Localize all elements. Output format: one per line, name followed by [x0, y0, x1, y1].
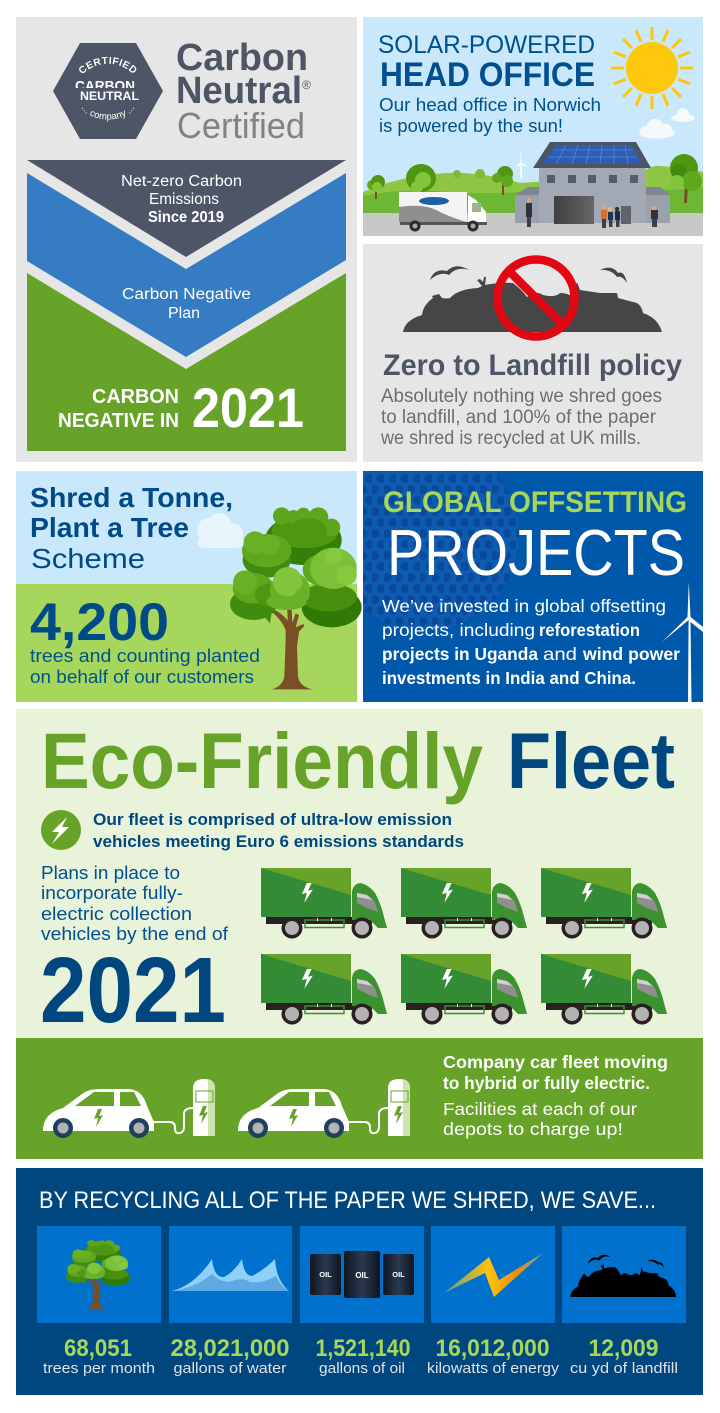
- icon: birds: [430, 266, 627, 283]
- icon: tree: [230, 507, 362, 689]
- chevron: carbon negative plan: Carbon Negative: [122, 286, 251, 303]
- heading: shred a tonne: Scheme: [31, 543, 145, 574]
- chevron: net-zero carbon emissions since 2019: [27, 160, 346, 257]
- text: landfill description: to landfill, and 100% of the paper: [381, 407, 657, 428]
- stat: gallons of water: [170, 1335, 290, 1377]
- stat: trees per month: [43, 1335, 155, 1377]
- icon: certified carbon neutral hexagon badge: company: [90, 110, 125, 122]
- stat: cu yd of landfill: cu yd of landfill: [570, 1360, 678, 1377]
- icon: landfill heap: [403, 277, 662, 332]
- text: landfill description: we shred is recycled at UK mills.: [380, 428, 641, 449]
- text: offsetting description: and: [543, 644, 577, 664]
- stat: gallons of water: gallons of water: [174, 1360, 287, 1377]
- heading: global offsetting projects: [383, 486, 687, 589]
- heading: eco-friendly fleet: Eco-Friendly: [41, 716, 483, 805]
- stat: trees per month: 68,051: [64, 1335, 132, 1362]
- stat: kilowatts of energy: kilowatts of energy: [427, 1360, 560, 1377]
- heading: solar-powered head office: [378, 31, 595, 94]
- chevron: carbon negative plan: [27, 173, 346, 357]
- chevron: carbon negative plan: Plan: [168, 305, 200, 322]
- text: head office description: is powered by the sun!: [379, 116, 563, 136]
- panel: eco-friendly fleet: [16, 709, 703, 1042]
- chevron: net-zero carbon emissions since 2019: Emissions: [149, 191, 219, 208]
- tile: oil: OIL: [355, 1271, 369, 1280]
- icon: lightning badge: [41, 810, 81, 850]
- illustration: shredding truck: [399, 192, 487, 232]
- panel: global offsetting projects: [363, 471, 703, 702]
- text: company car fleet: depots to charge up!: [443, 1119, 623, 1139]
- text: company car fleet: Company car fleet moving: [443, 1052, 668, 1072]
- icon: electric car and charger: [43, 1079, 215, 1138]
- stat: 4,200 trees: trees and counting planted: [30, 646, 260, 666]
- chevron: carbon negative in 2021: NEGATIVE IN: [58, 410, 179, 432]
- text: offsetting description: wind power: [582, 644, 680, 664]
- text: fleet emissions standard: [93, 810, 464, 851]
- tile: oil: [300, 1226, 424, 1323]
- tile: trees: [37, 1226, 161, 1323]
- icon: sun: [611, 27, 693, 109]
- text: electric vehicle plans: incorporate fully-: [41, 882, 183, 903]
- text: offsetting description: projects, including: [382, 620, 535, 640]
- icon: certified carbon neutral hexagon badge: CERTIFIED: [79, 56, 136, 73]
- heading: carbon neutral certified: ®: [302, 78, 311, 92]
- icon: certified carbon neutral hexagon badge: [53, 43, 163, 139]
- stat: kilowatts of energy: 16,012,000: [436, 1335, 550, 1362]
- heading: carbon neutral certified: Certified: [177, 105, 305, 146]
- icon: wind turbine: [516, 152, 527, 178]
- icon: certified carbon neutral hexagon badge: NEUTRAL: [80, 89, 139, 103]
- tile: oil: OIL: [392, 1270, 405, 1279]
- heading: shred a tonne: [30, 482, 233, 574]
- text: head office description: [379, 95, 601, 136]
- text: offsetting description: We’ve invested in global offsetting: [382, 596, 666, 616]
- heading: carbon neutral certified: [176, 37, 311, 146]
- panel: company car fleet: [16, 1038, 703, 1159]
- heading: carbon neutral certified: Carbon: [176, 37, 308, 79]
- icon: clouds: [639, 108, 695, 138]
- tile: energy: [431, 1226, 555, 1323]
- text: offsetting description: investments in India and China.: [382, 668, 636, 688]
- text: electric vehicle plans: electric collection: [41, 903, 192, 924]
- heading: shred a tonne: Plant a Tree: [30, 512, 189, 543]
- text: head office description: Our head office in Norwich: [379, 95, 601, 115]
- icon: dotted globe: [363, 471, 519, 631]
- panel: solar-powered head office: [363, 17, 703, 236]
- chevron: net-zero carbon emissions since 2019: Net-zero Carbon: [121, 173, 242, 190]
- text: offsetting description: reforestation: [539, 620, 640, 640]
- stat: gallons of oil: gallons of oil: [319, 1360, 405, 1377]
- chevron: carbon negative in 2021: [27, 273, 346, 451]
- text: electric vehicle plans: [41, 862, 229, 944]
- tile: oil: OIL: [319, 1270, 332, 1279]
- icon: cloud: [197, 513, 243, 548]
- icon: small trees: [367, 154, 702, 203]
- stat: gallons of water: 28,021,000: [170, 1335, 290, 1362]
- text: electric vehicle plans: Plans in place to: [41, 862, 180, 883]
- illustration: head office building: [515, 142, 670, 224]
- icons: six electric trucks: [261, 868, 667, 1024]
- chevron: carbon negative in 2021: CARBON: [92, 386, 179, 408]
- heading: shred a tonne: Shred a Tonne,: [30, 482, 233, 513]
- text: fleet emissions standard: Our fleet is comprised of ultra-low emission: [93, 810, 452, 829]
- heading: carbon neutral certified: Neutral: [176, 70, 302, 112]
- panel: recycling savings: [16, 1168, 703, 1395]
- text: offsetting description: [382, 596, 680, 688]
- stat: 2021: 2021: [40, 938, 226, 1042]
- illustration: staff figures: [526, 198, 658, 228]
- icon: prohibition sign: [498, 260, 574, 336]
- heading: eco-friendly fleet: Fleet: [507, 716, 675, 805]
- stat: gallons of oil: 1,521,140: [316, 1335, 410, 1362]
- icon: wind turbine: [662, 582, 703, 702]
- stat: cu yd of landfill: 12,009: [588, 1335, 658, 1362]
- heading: solar-powered head office: SOLAR-POWERED: [378, 31, 595, 59]
- heading: by recycling all of the paper: BY RECYCLING ALL OF THE PAPER WE SHRED, WE SAVE...: [39, 1187, 656, 1214]
- stat: 4,200 trees: 4,200: [30, 593, 169, 652]
- text: electric vehicle plans: vehicles by the end of: [41, 923, 229, 944]
- heading: solar-powered head office: HEAD OFFICE: [380, 56, 595, 94]
- panel: carbon neutral certified: [16, 17, 357, 462]
- text: landfill description: [380, 386, 662, 449]
- landscape: hills and road: [363, 166, 703, 236]
- stat: gallons of oil: [316, 1335, 410, 1377]
- panel: zero to landfill policy: [363, 244, 703, 462]
- stat: 4,200 trees: on behalf of our customers: [30, 667, 254, 687]
- stat: trees per month: trees per month: [43, 1360, 155, 1377]
- text: offsetting description: projects in Uganda: [382, 644, 538, 664]
- tile: landfill: [562, 1226, 686, 1323]
- text: company car fleet: Facilities at each of our: [443, 1099, 637, 1119]
- panel: shred a tonne, plant a tree: [16, 471, 362, 702]
- chevron: net-zero carbon emissions since 2019: Since 2019: [148, 209, 224, 226]
- text: company car fleet: to hybrid or fully electric.: [443, 1073, 650, 1093]
- text: landfill description: Absolutely nothing we shred goes: [381, 386, 662, 407]
- text: company car fleet: [443, 1052, 668, 1139]
- heading: global offsetting projects: GLOBAL OFFSETTING: [383, 486, 687, 519]
- heading: zero to landfill policy: Zero to Landfill policy: [383, 349, 682, 382]
- stat: cu yd of landfill: [570, 1335, 678, 1377]
- tile: water: [169, 1226, 292, 1323]
- icon: certified carbon neutral hexagon badge: CARBON: [75, 78, 135, 94]
- stat: 4,200 trees: [30, 593, 260, 687]
- icon: electric car and charger: [238, 1079, 410, 1138]
- chevron: carbon negative in 2021: 2021: [192, 376, 304, 439]
- text: fleet emissions standard: vehicles meeting Euro 6 emissions standards: [93, 832, 464, 851]
- stat: kilowatts of energy: [427, 1335, 560, 1377]
